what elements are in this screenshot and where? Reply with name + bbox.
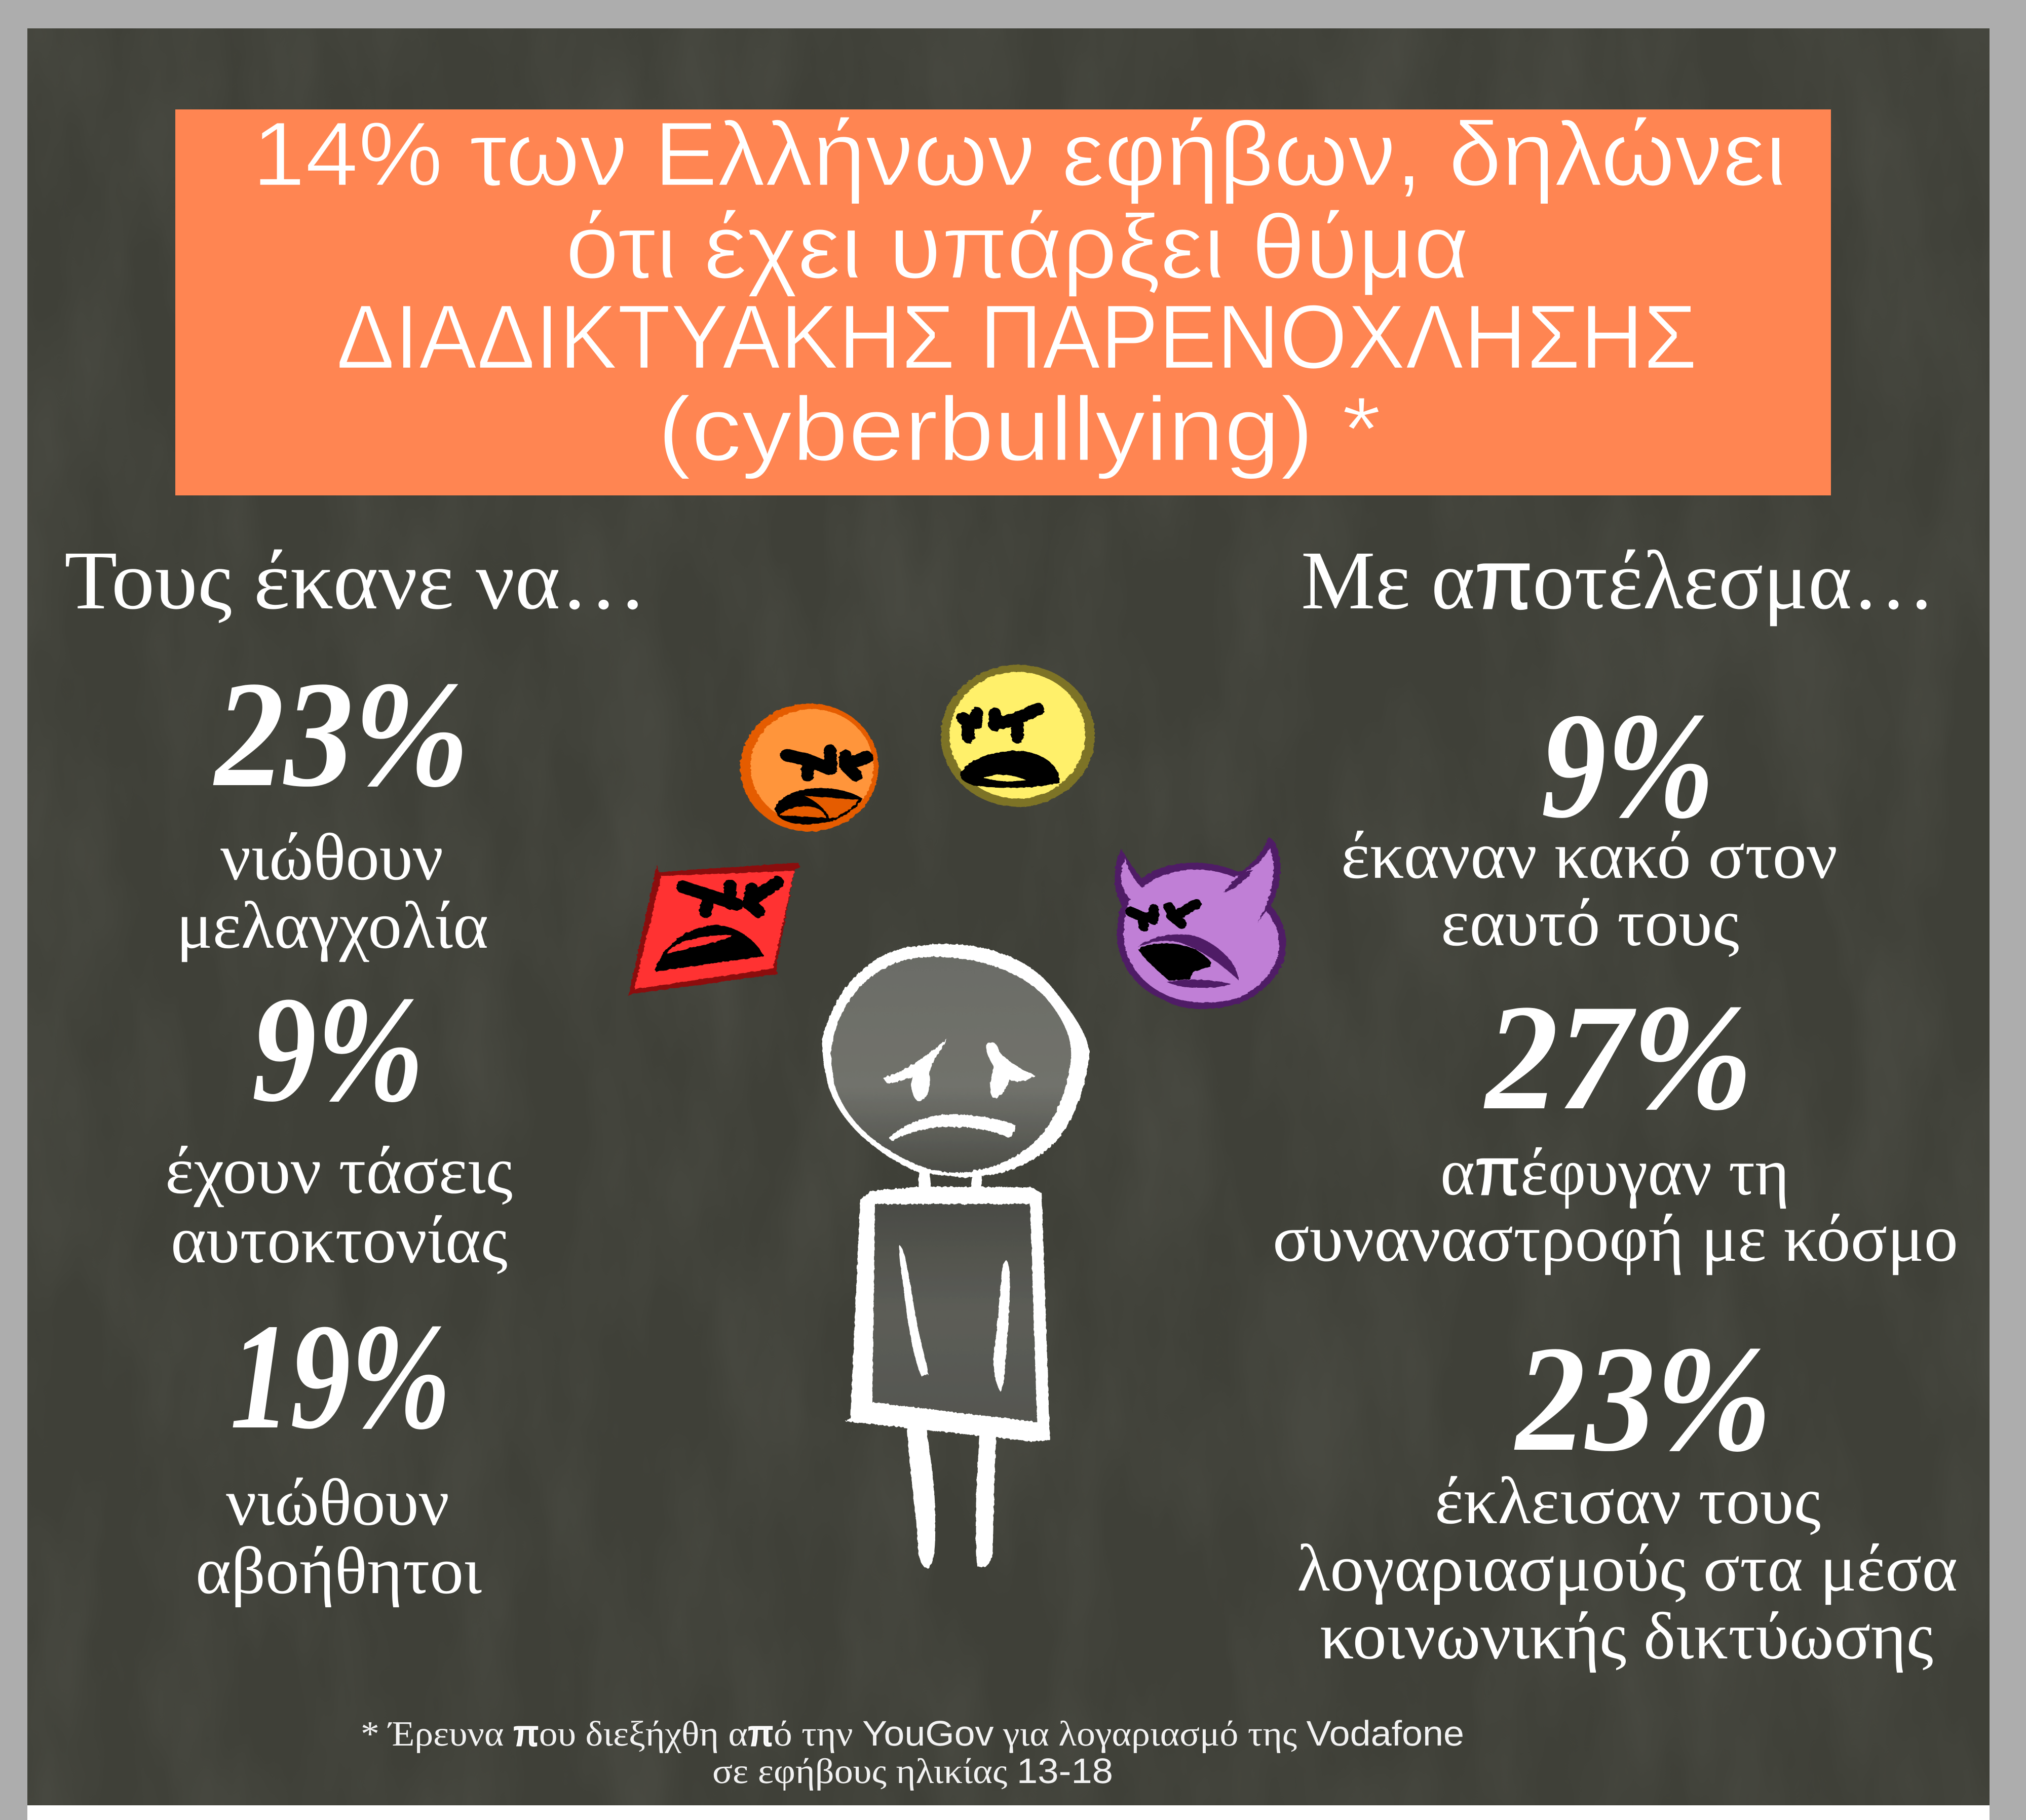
icon: purple devil face: [1115, 837, 1286, 1009]
figure body: [845, 1186, 1050, 1442]
stat: 19% helpless: [196, 1292, 482, 1608]
stat: 23% melancholy: μελαγχολία: [176, 888, 488, 962]
left heading: Τους έκανε να…: [64, 534, 647, 627]
stat: 27% avoided company: συναναστροφή με κόσμο: [1273, 1201, 1958, 1275]
stat: 27% avoided company: 27%: [1483, 973, 1753, 1141]
figure head: [822, 944, 1090, 1178]
title banner: [175, 103, 1831, 495]
stat: 19% helpless: 19%: [230, 1292, 451, 1460]
stat: 9% self harm: εαυτό τους: [1441, 885, 1739, 960]
stat: 9% self harm: [1341, 681, 1838, 960]
right heading: Με αποτέλεσμα…: [1301, 533, 1935, 627]
stat: 23% melancholy: 23%: [213, 650, 469, 818]
footnote: * Έρευνα που διεξήχθη α πό την YouGov για λογαριασμό της Vodafone: [361, 1714, 1464, 1754]
left column: feelings: [165, 650, 513, 1608]
stat: 9% suicidal tendencies: έχουν τάσεις: [165, 1133, 513, 1208]
right column: results: [1273, 681, 1958, 1673]
title banner: ΔΙΑΔΙΚΤΥΑΚΗΣ ΠΑΡΕΝΟΧΛΗΣΗΣ: [336, 286, 1697, 388]
icon: sad chalk figure: [822, 944, 1090, 1568]
figure neck: [918, 1169, 982, 1191]
stat: 23% closed accounts: 23%: [1514, 1314, 1772, 1483]
title banner: (cyberbullying) *: [658, 378, 1381, 480]
white bottom strip: [27, 1805, 1990, 1820]
stat: 9% suicidal tendencies: 9%: [252, 965, 424, 1133]
title banner: 14% των Ελλήνων εφήβων, δηλώνει: [252, 103, 1786, 205]
stat: 9% suicidal tendencies: αυτοκτονίας: [171, 1203, 508, 1277]
stat: 23% closed accounts: κοινωνικής δικτύωσης: [1320, 1599, 1933, 1673]
stat: 9% self harm: έκαναν κακό στον: [1341, 818, 1838, 893]
footnote: [361, 1714, 1464, 1791]
stat: 27% avoided company: [1273, 973, 1958, 1275]
stat: 19% helpless: αβοήθητοι: [196, 1533, 482, 1608]
stat: 23% closed accounts: λογαριασμούς στα μέσα: [1297, 1531, 1958, 1605]
stat: 23% closed accounts: έκλεισαν τους: [1435, 1463, 1821, 1538]
footnote: σε εφήβους ηλικίας 13-18: [712, 1751, 1113, 1791]
icon: yellow angry face: [941, 665, 1095, 807]
figure legs: [907, 1424, 997, 1568]
stat: 23% melancholy: [176, 650, 488, 962]
icon: orange angry face: [740, 704, 878, 832]
stat: 27% avoided company: απέφυγαν τη: [1440, 1134, 1789, 1209]
stat: 23% closed accounts: [1297, 1314, 1958, 1673]
icon: red angry square: [628, 863, 800, 996]
stat: 9% suicidal tendencies: [165, 965, 513, 1277]
stat: 9% self harm: 9%: [1541, 681, 1714, 849]
stat: 19% helpless: νιώθουν: [226, 1465, 449, 1539]
stat: 23% melancholy: νιώθουν: [220, 820, 443, 894]
title banner: ότι έχει υπάρξει θύμα: [565, 196, 1469, 298]
